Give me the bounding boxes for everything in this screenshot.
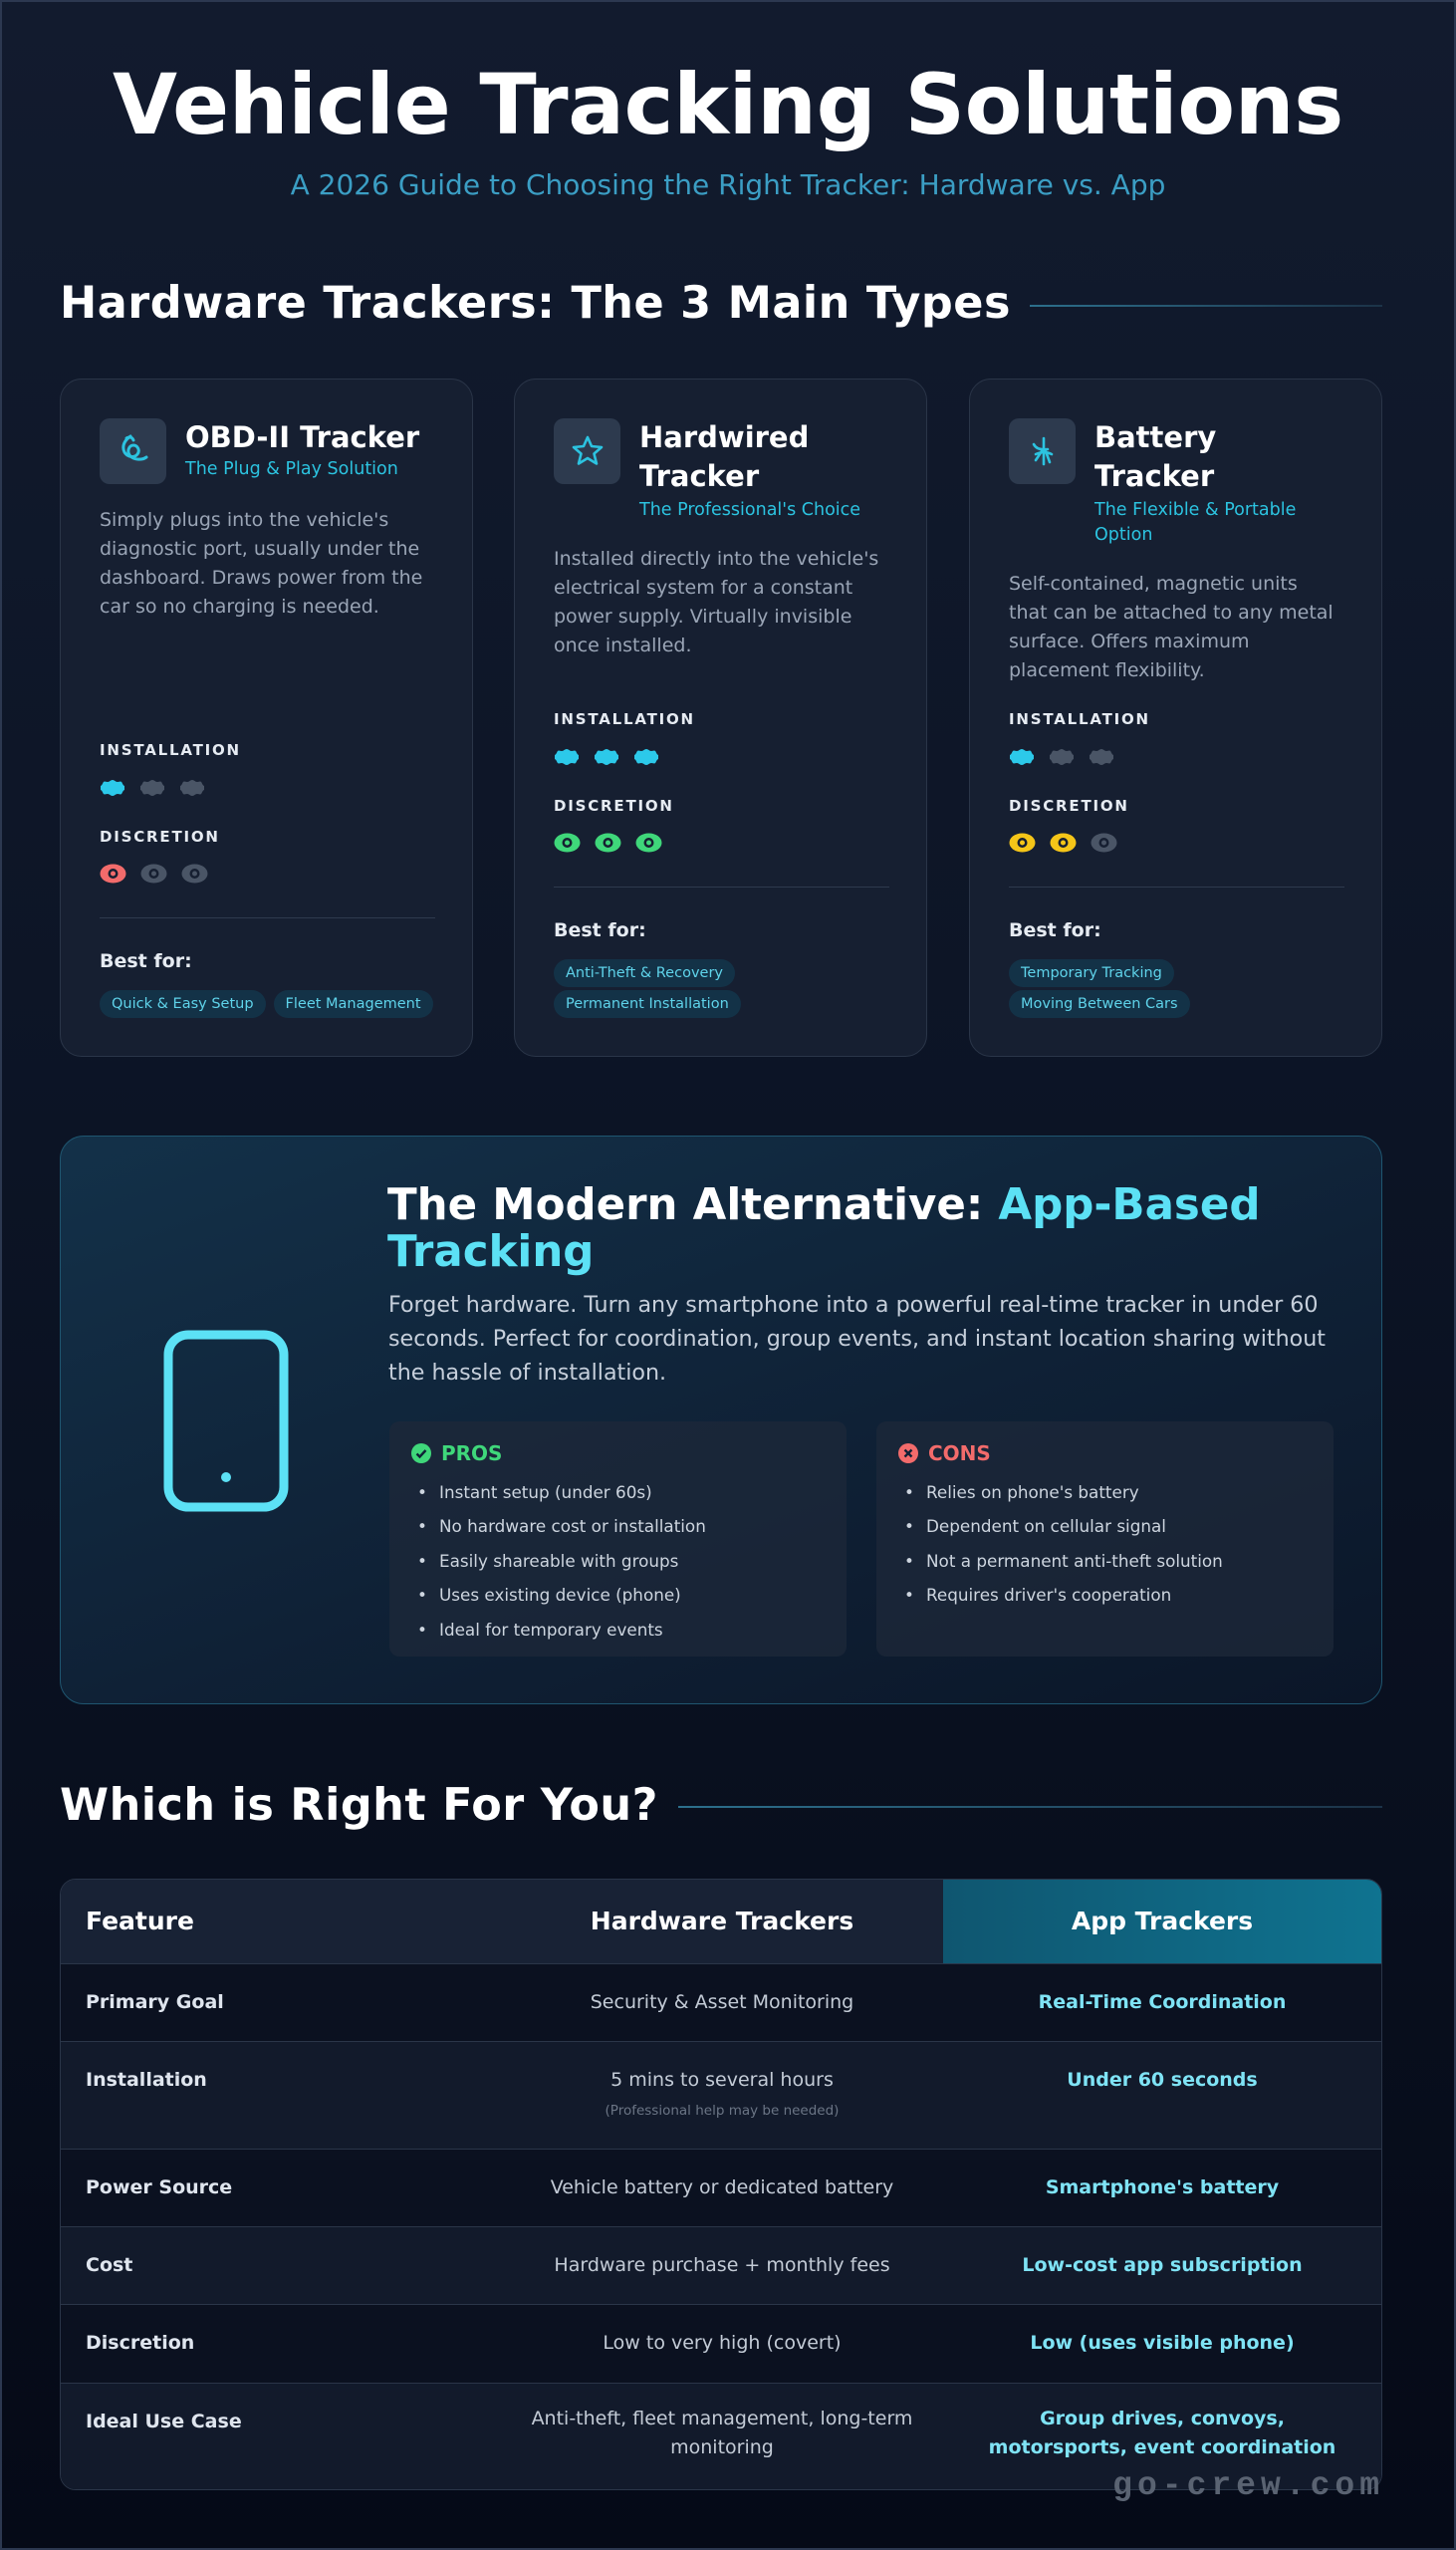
pros box: Ideal for temporary events bbox=[439, 1620, 663, 1640]
cons box: Relies on phone's battery bbox=[926, 1482, 1139, 1502]
comparison table: Security & Asset Monitoring bbox=[591, 1990, 853, 2012]
description: Simply plugs into the vehicle's diagnostic port, usually under the dashboard. Draws power from the car so no charging is needed. bbox=[100, 509, 422, 618]
description: Self-contained, magnetic units that can be attached to any metal surface. Offers maximum placement flexibility. bbox=[1009, 573, 1334, 681]
ratings and best for: Temporary Tracking bbox=[1021, 965, 1162, 981]
icon: plug bbox=[100, 418, 166, 484]
comparison table: Group drives, convoys, bbox=[1040, 2407, 1285, 2428]
heading: hardware trackers: Hardware Trackers: The 3 Main Types bbox=[60, 278, 1011, 329]
ratings and best for: INSTALLATION bbox=[554, 710, 695, 728]
icon: magnet squiggle bbox=[1009, 418, 1076, 484]
comparison table: Cost bbox=[86, 2253, 132, 2275]
ratings and best for: Moving Between Cars bbox=[1021, 996, 1178, 1012]
comparison table: Low to very high (covert) bbox=[603, 2331, 842, 2353]
pros box: PROS bbox=[441, 1441, 502, 1465]
card header: OBD-II bbox=[100, 418, 420, 484]
pros box bbox=[389, 1421, 847, 1657]
heading: modern alternative: The Modern Alternative: App-Based Tracking bbox=[387, 1180, 1260, 1277]
paragraph: seconds. Perfect for coordination, group events, and instant location sharing without bbox=[388, 1326, 1326, 1352]
ratings and best for: INSTALLATION bbox=[1009, 710, 1150, 728]
cons box bbox=[876, 1421, 1334, 1657]
ratings and best for bbox=[1009, 710, 1344, 1018]
comparison table: Feature bbox=[86, 1907, 194, 1935]
comparison table: Smartphone's battery bbox=[1046, 2175, 1279, 2197]
comparison table: monitoring bbox=[670, 2436, 774, 2458]
comparison table: motorsports, event coordination bbox=[989, 2436, 1335, 2458]
card header: Battery: Battery Tracker bbox=[1094, 420, 1216, 493]
card header: Battery bbox=[1009, 418, 1296, 545]
ratings and best for: INSTALLATION bbox=[100, 741, 241, 759]
ratings and best for: DISCRETION bbox=[554, 797, 674, 815]
ratings and best for: Best for: bbox=[100, 950, 192, 972]
card header: Hardwired: Hardwired Tracker bbox=[639, 420, 809, 493]
panel: OBD-II tracker card bbox=[60, 379, 473, 1057]
card header: Battery: The Flexible & Portable Option bbox=[1094, 500, 1296, 545]
comparison table: Under 60 seconds bbox=[1067, 2068, 1258, 2090]
panel: Hardwired tracker card bbox=[514, 379, 927, 1057]
watermark: go-crew.com bbox=[1112, 2467, 1384, 2504]
cons box: Dependent on cellular signal bbox=[926, 1516, 1166, 1536]
ratings and best for: Quick & Easy Setup bbox=[112, 996, 254, 1012]
ratings and best for bbox=[100, 741, 435, 1018]
comparison table: Vehicle battery or dedicated battery bbox=[551, 2175, 893, 2197]
comparison table: Power Source bbox=[86, 2175, 232, 2197]
comparison table: Ideal Use Case bbox=[86, 2411, 242, 2432]
comparison table: Primary Goal bbox=[86, 1990, 224, 2012]
comparison table bbox=[60, 1879, 1382, 2490]
heading: which is right: Which is Right For You? bbox=[60, 1780, 658, 1831]
comparison table: Installation bbox=[86, 2068, 207, 2090]
pros box: Instant setup (under 60s) bbox=[439, 1482, 652, 1502]
cons box: Requires driver's cooperation bbox=[926, 1585, 1171, 1605]
card header: Hardwired bbox=[554, 418, 860, 520]
card header: OBD-II: OBD-II Tracker bbox=[185, 420, 419, 454]
ratings and best for: DISCRETION bbox=[100, 828, 220, 846]
pros box: Uses existing device (phone) bbox=[439, 1585, 681, 1605]
ratings and best for: DISCRETION bbox=[1009, 797, 1129, 815]
cons box: Not a permanent anti-theft solution bbox=[926, 1551, 1223, 1571]
card header: OBD-II: The Plug & Play Solution bbox=[185, 459, 398, 479]
comparison table: Low-cost app subscription bbox=[1022, 2253, 1303, 2275]
ratings and best for bbox=[554, 710, 889, 1018]
comparison table: Real-Time Coordination bbox=[1039, 1990, 1286, 2012]
comparison table: Discretion bbox=[86, 2331, 194, 2353]
paragraph: Forget hardware. Turn any smartphone into a powerful real-time tracker in under 60 bbox=[388, 1292, 1319, 1318]
comparison table: Hardware Trackers bbox=[591, 1907, 853, 1935]
comparison table: (Professional help may be needed) bbox=[606, 2102, 839, 2118]
ratings and best for: Anti-Theft & Recovery bbox=[566, 965, 723, 981]
paragraph bbox=[388, 1292, 1326, 1386]
panel: app-based tracking bbox=[60, 1136, 1382, 1704]
comparison table: Anti-theft, fleet management, long-term bbox=[532, 2407, 912, 2428]
comparison table: 5 mins to several hours bbox=[610, 2068, 834, 2090]
comparison table: App Trackers bbox=[1072, 1907, 1253, 1935]
icon: star bbox=[554, 418, 620, 484]
title: Vehicle Tracking Solutions bbox=[113, 56, 1343, 153]
panel: Battery tracker card bbox=[969, 379, 1382, 1057]
cons box: CONS bbox=[928, 1441, 991, 1465]
pros box: No hardware cost or installation bbox=[439, 1516, 706, 1536]
ratings and best for: Fleet Management bbox=[286, 996, 421, 1012]
paragraph: the hassle of installation. bbox=[388, 1360, 666, 1386]
ratings and best for: Best for: bbox=[554, 919, 646, 941]
comparison table: Hardware purchase + monthly fees bbox=[554, 2253, 890, 2275]
comparison table: Low (uses visible phone) bbox=[1030, 2331, 1295, 2353]
ratings and best for: Permanent Installation bbox=[566, 996, 729, 1012]
description: Installed directly into the vehicle's electrical system for a constant power supply. Virtually invisible once installed. bbox=[554, 548, 878, 656]
ratings and best for: Best for: bbox=[1009, 919, 1101, 941]
subtitle: A 2026 Guide to Choosing the Right Tracker: Hardware vs. App bbox=[291, 168, 1165, 201]
icon: smartphone bbox=[163, 1331, 289, 1512]
pros box: Easily shareable with groups bbox=[439, 1551, 678, 1571]
card header: Hardwired: The Professional's Choice bbox=[639, 500, 860, 520]
